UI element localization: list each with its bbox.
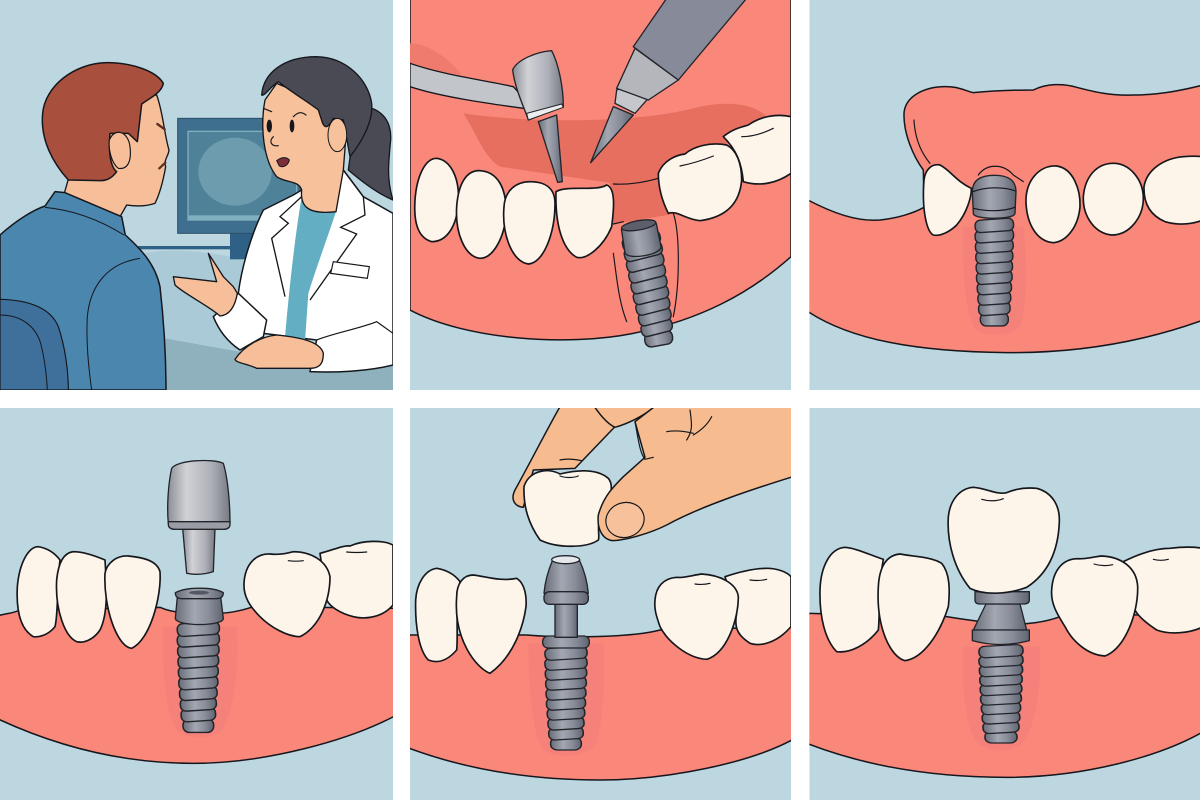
dentist ear: [328, 118, 347, 152]
left teeth: [17, 547, 160, 648]
thumbnail: [601, 497, 649, 543]
panel: drilling into the gum and placing implant: [410, 0, 791, 390]
upper finger knuckle: [593, 405, 657, 427]
abutment on implant: [544, 556, 588, 637]
gum tissue: [407, 627, 795, 780]
desk: [143, 251, 393, 390]
front teeth: [415, 158, 614, 264]
panel: fingers placing the crown over the abutment: [407, 405, 795, 800]
gum fold line: [914, 120, 930, 163]
dentist in white coat: [173, 57, 393, 372]
socket lines: [613, 178, 678, 322]
patient eyebrow and mouth: [157, 124, 165, 168]
panel: abutment lowered onto the implant: [0, 408, 397, 800]
implant socket: [528, 643, 604, 756]
implant screw: [175, 588, 223, 732]
dentist coat: [238, 170, 393, 372]
palm and thumb: [598, 405, 795, 541]
patient face and neck: [63, 95, 169, 217]
dentist teal shirt: [285, 197, 336, 342]
abutment piece: [168, 461, 230, 574]
implant screw: [543, 636, 589, 750]
index finger: [513, 407, 615, 507]
patient hair: [42, 63, 163, 181]
chair: [0, 299, 68, 390]
dentist face: [263, 83, 347, 212]
panel: implant embedded in the jaw: [807, 0, 1200, 390]
crown held between fingers: [524, 471, 611, 546]
inner mouth shading: [464, 104, 766, 183]
patient ear: [109, 132, 130, 169]
dental handpiece: [410, 51, 563, 182]
gum tissue: [410, 0, 791, 340]
left teeth: [416, 568, 526, 673]
tilted implant screw: [620, 219, 674, 348]
dentist hair: [262, 57, 372, 157]
panel: finished crown on implant: [807, 408, 1200, 800]
back molars: [658, 115, 791, 221]
gum tissue: [807, 85, 1200, 353]
right molars: [655, 568, 791, 659]
right molars: [1052, 547, 1200, 656]
implant socket: [963, 227, 1026, 335]
teeth: [923, 156, 1200, 243]
patient seen from behind: [0, 63, 169, 390]
left teeth: [820, 547, 949, 661]
hand holding crown: [513, 405, 795, 546]
dentist hair ponytail: [348, 107, 393, 200]
right molars: [244, 541, 393, 637]
implant screw: [979, 644, 1023, 743]
drill instrument: [591, 0, 747, 163]
gum tissue: [807, 613, 1200, 777]
gum tissue: [0, 607, 397, 763]
abutment: [972, 592, 1029, 644]
gesturing hand: [173, 253, 237, 316]
crown: [948, 487, 1059, 593]
dentist name badge: [331, 262, 369, 278]
resting hand: [235, 335, 323, 368]
implant screw: [972, 175, 1016, 326]
monitor showing x-ray: [138, 118, 301, 259]
implant socket: [963, 647, 1040, 750]
panel: consultation between patient and dentist: [0, 0, 393, 390]
patient blue shirt: [0, 192, 166, 390]
dentist facial features: [263, 108, 306, 167]
implant socket: [163, 627, 238, 737]
dentist forearm: [213, 293, 267, 350]
